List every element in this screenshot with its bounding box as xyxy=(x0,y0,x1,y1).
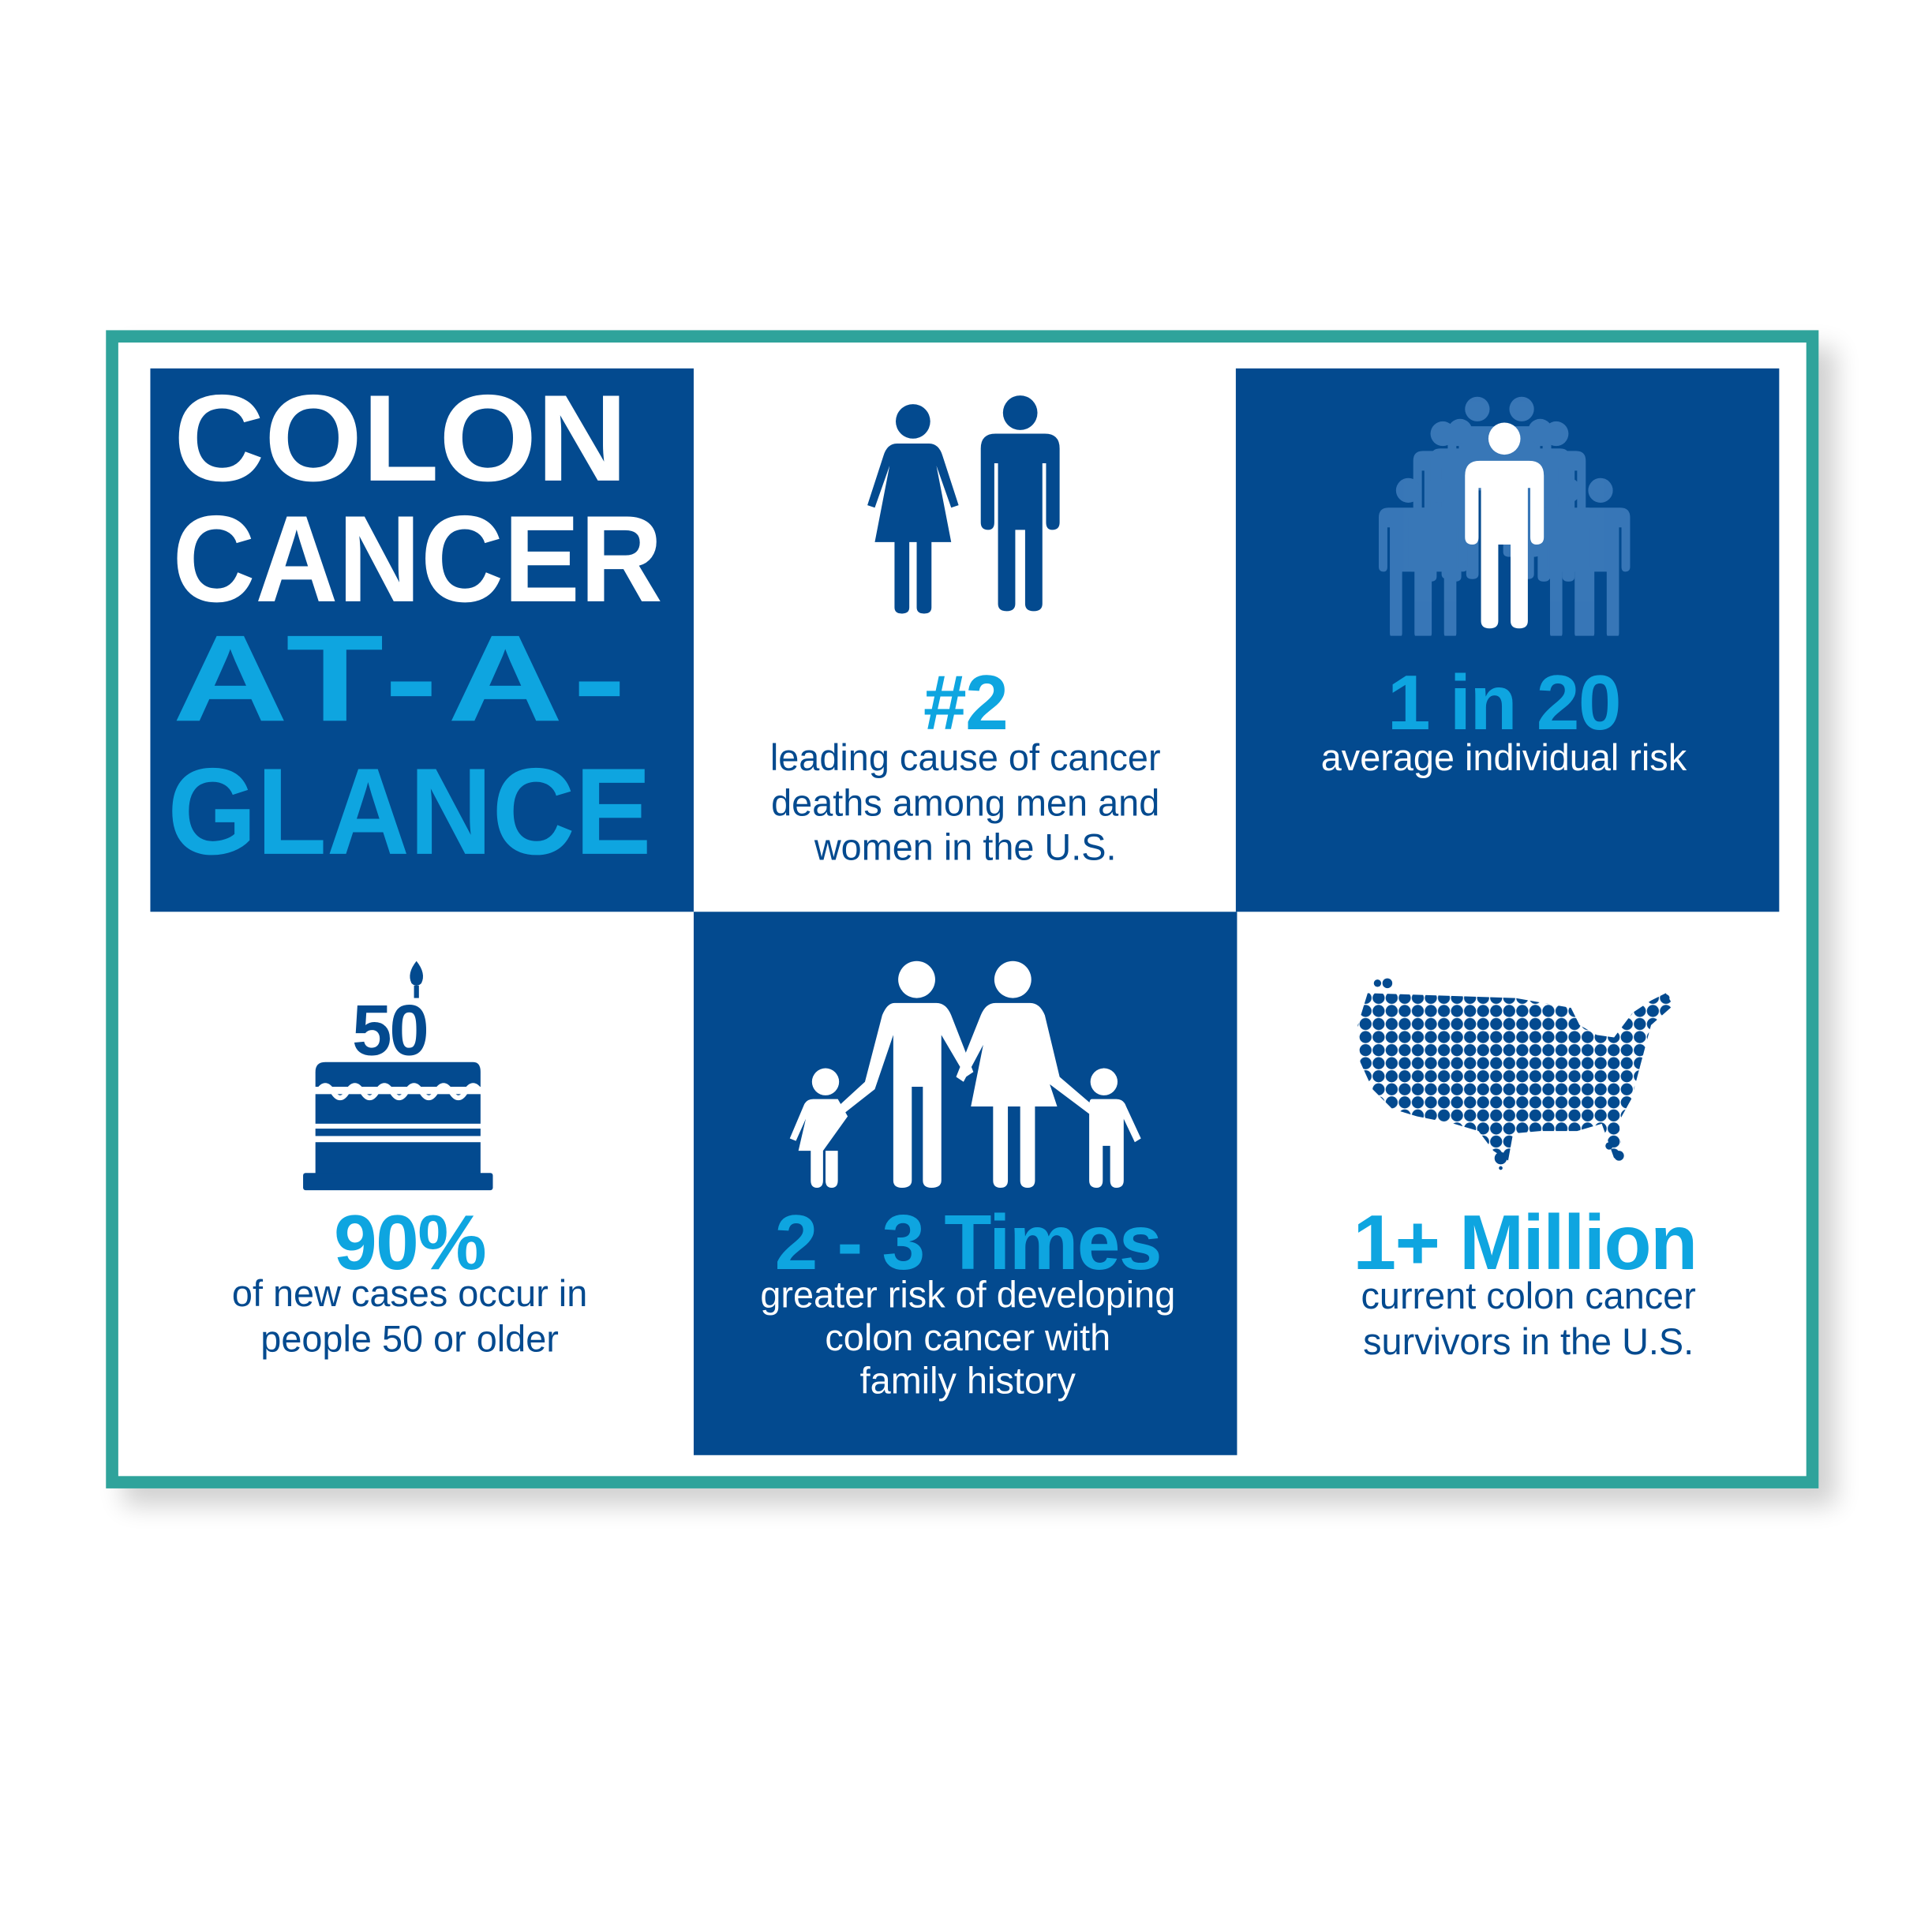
stat: 1 in 20: 1 in 20 xyxy=(1387,661,1620,747)
stat: #2: #2 xyxy=(923,661,1007,747)
text: leading cause: deaths among men and xyxy=(771,783,1159,824)
text: leading cause xyxy=(770,738,1161,869)
stat: 1+ Million: 1+ Million xyxy=(1353,1200,1697,1286)
stat: 2 - 3 Times: 2 - 3 Times xyxy=(775,1200,1161,1286)
icon: crowd xyxy=(1379,396,1631,636)
title xyxy=(167,369,663,881)
text: survivors: survivors in the U.S. xyxy=(1363,1321,1694,1362)
text: leading cause: women in the U.S. xyxy=(814,828,1117,869)
shadow xyxy=(123,347,1836,1506)
icon: birthday cake xyxy=(303,961,492,1190)
title: CANCER: CANCER xyxy=(173,490,663,628)
title: AT-A-: AT-A- xyxy=(173,610,635,748)
panel: 1 in 20 xyxy=(1236,369,1779,912)
panel: title xyxy=(150,369,694,912)
icon: woman and man xyxy=(867,395,1060,614)
text: leading cause: leading cause of cancer xyxy=(770,738,1161,779)
stat: 90%: 90% xyxy=(334,1200,485,1286)
frame xyxy=(106,330,1818,1488)
title: COLON: COLON xyxy=(174,369,627,507)
text: survivors: current colon cancer xyxy=(1361,1276,1696,1317)
text: average individual risk: average individual risk xyxy=(1321,738,1687,779)
panel: 2-3 times xyxy=(694,912,1237,1455)
title: GLANCE: GLANCE xyxy=(167,743,651,881)
icon: family xyxy=(789,961,1141,1188)
text: of new cases: people 50 or older xyxy=(260,1319,559,1360)
text: of new cases: of new cases occur in xyxy=(232,1274,587,1315)
text: greater risk xyxy=(760,1275,1175,1402)
text: greater risk: greater risk of developing xyxy=(760,1275,1175,1316)
text: survivors xyxy=(1361,1276,1696,1362)
text: of new cases xyxy=(232,1274,587,1360)
text: greater risk: family history xyxy=(860,1361,1076,1402)
icon: birthday cake: 50 xyxy=(352,990,427,1070)
icon: US map dots xyxy=(1357,979,1672,1170)
text: greater risk: colon cancer with xyxy=(825,1318,1110,1359)
